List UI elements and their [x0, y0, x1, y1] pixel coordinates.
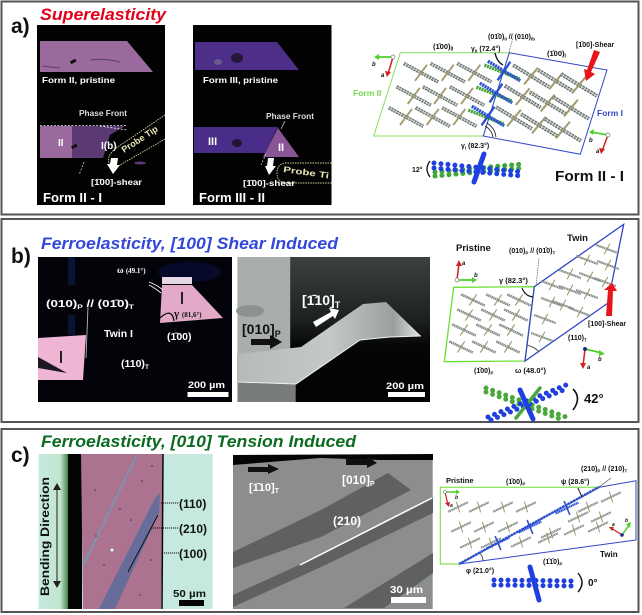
photo: bending optical: [38, 454, 213, 609]
diagram: pristine and twin tension lattice: P: [522, 482, 525, 486]
photo: twin optical: // (01̄0): [83, 298, 129, 310]
photo: form III to II: [1̄00]-shear: [243, 178, 296, 188]
diagram: pristine and twin lattice: T: [552, 250, 555, 256]
photo: bending optical: (210): [179, 522, 207, 536]
photo: twin optical: T: [145, 364, 149, 371]
diagram: pristine and twin lattice: Twin: [567, 233, 588, 244]
icon: axes twin c: [609, 518, 631, 537]
icon: axes twin: [580, 347, 605, 371]
label: 42 degrees: 42°: [584, 391, 604, 406]
photo: form III to II: Probe Ti: [283, 164, 330, 180]
photo: bending optical: Bending Direction: [38, 477, 52, 596]
photo: twin optical: γ (81,6°): [173, 308, 202, 320]
diagram: pristine and twin tension lattice: P: [597, 468, 600, 474]
diagram: pristine and twin lattice: // (01̄0): [528, 247, 552, 255]
heading: superelasticity: Superelasticity: [40, 6, 167, 24]
diagram: form II and I lattice: [353, 33, 624, 185]
label: 0 degrees: 0°: [588, 578, 598, 589]
photo: bending SEM: [233, 454, 433, 609]
photo: bending SEM: [010]: [342, 473, 370, 487]
photo: bending optical: 50 µm: [173, 589, 206, 600]
diagram: form II and I lattice: // (010): [507, 34, 531, 41]
diagram: pristine and twin tension lattice: T: [624, 468, 627, 474]
diagram: form II and I lattice: (1̄00): [433, 42, 451, 51]
photo: form III to II: III: [208, 136, 217, 148]
panel: c ferroelasticity tension: [2, 429, 638, 612]
diagram: form II and I lattice: I: [565, 54, 567, 60]
photo: twin SEM: P: [275, 329, 281, 339]
diagram: pristine and twin tension lattice: φ (21.0°): [466, 567, 494, 575]
photo: bending optical: (110): [179, 497, 206, 511]
diagram: pristine and twin tension lattice: P: [559, 562, 562, 566]
diagram: pristine and twin tension lattice: [440, 466, 636, 600]
icon: axes pristine: b: [474, 273, 478, 279]
panel label a: a): [11, 15, 30, 38]
photo: twin SEM: [236, 257, 430, 402]
photo: form II to I: Probe Tip: [120, 124, 160, 155]
icon: axes twin c: a: [612, 522, 615, 528]
diagram: pristine and twin tension lattice: ψ (28.6°): [561, 478, 589, 486]
diagram: pristine and twin lattice: γ (82.3°): [499, 276, 528, 285]
icon: axes form I: [589, 129, 610, 155]
diagram: form II and I lattice: Form I: [597, 108, 623, 118]
diagram: pristine and twin lattice: P: [490, 370, 493, 376]
icon: axes twin: a: [587, 365, 591, 371]
diagram: form II and I lattice: Ib: [531, 36, 535, 42]
panel: b ferroelasticity shear: [2, 219, 638, 422]
photo: form III to II: Phase Front: [266, 112, 314, 121]
icon: axes pristine c: a: [450, 503, 453, 509]
diagram: pristine and twin lattice: (010): [509, 248, 525, 255]
photo: twin SEM: [010]: [242, 321, 275, 337]
photo: twin optical: ω (49.1°): [117, 265, 146, 275]
photo: bending SEM: P: [370, 481, 375, 488]
diagram: pristine and twin tension lattice: // (210): [600, 466, 624, 473]
icon: axes twin: b: [598, 357, 602, 363]
photo: form II to I: Phase Front: [79, 109, 127, 118]
diagram: pristine and twin lattice: T: [584, 338, 587, 342]
photo: twin optical: (010): [46, 298, 71, 310]
photo: form III to II: [193, 25, 332, 205]
panel label c: c): [11, 444, 30, 467]
diagram: pristine and twin tension lattice: (210): [581, 466, 597, 473]
photo: twin optical: (110): [121, 358, 145, 370]
photo: bending optical: (100): [179, 547, 207, 561]
photo: twin optical: (1̄00): [167, 331, 192, 343]
molecule: form II-I overlay: 12°: [412, 166, 423, 174]
photo: twin SEM: 200 µm: [386, 381, 424, 392]
photo: twin optical: 200 µm: [188, 380, 225, 390]
diagram: pristine and twin lattice: (1̄00): [474, 368, 490, 375]
photo: twin optical: P: [77, 304, 84, 311]
molecule: tension overlay: [494, 567, 576, 600]
diagram: pristine and twin lattice: ω (48.0°): [515, 366, 547, 375]
diagram: pristine and twin tension lattice: (1̄00): [506, 479, 522, 486]
diagram: form II and I lattice: II: [475, 48, 477, 54]
icon: axes form II: b: [372, 62, 376, 68]
photo: twin optical: [38, 257, 232, 402]
photo: twin SEM: T: [335, 300, 341, 310]
diagram: form II and I lattice: Form II: [353, 88, 381, 98]
photo: twin optical: T: [129, 304, 134, 311]
icon: axes pristine: [455, 260, 478, 283]
diagram: pristine and twin tension lattice: Twin: [600, 550, 618, 559]
photo: form II to I: [37, 25, 165, 205]
heading: ferroelasticity tension: Ferroelasticity, [010] Tension Induced: [41, 432, 357, 451]
icon: axes pristine c: b: [455, 495, 458, 501]
diagram: form II and I lattice: (72.4°): [477, 45, 500, 53]
icon: axes pristine c: [444, 490, 460, 509]
photo: form II to I: Form II - I: [43, 190, 102, 205]
photo: bending SEM: (210): [333, 514, 361, 528]
diagram: pristine and twin tension lattice: Pristine: [446, 476, 474, 485]
photo: form III to II: Form III - II: [199, 190, 265, 205]
diagram: form II and I lattice: γ: [461, 143, 465, 150]
photo: form III to II: Form III, pristine: [203, 75, 278, 85]
panel label b: b): [11, 245, 31, 268]
photo: bending SEM: [1̄10]: [249, 482, 275, 494]
icon: axes form I: a: [596, 149, 600, 155]
diagram: form II and I lattice: (82.3°): [466, 142, 489, 150]
diagram: form II and I lattice: [1̄00]-Shear: [576, 41, 614, 49]
photo: form II to I: I(b): [101, 141, 117, 152]
diagram: form II and I lattice: II: [451, 46, 454, 52]
diagram: pristine and twin lattice: Pristine: [456, 243, 491, 254]
icon: axes pristine: a: [462, 261, 466, 267]
photo: form II to I: Form II, pristine: [42, 75, 115, 85]
diagram: form II and I lattice: γ: [471, 46, 475, 53]
diagram: pristine and twin tension lattice: (1̄1̄0): [543, 559, 559, 566]
icon: axes form II: [372, 54, 395, 79]
icon: axes twin c: b: [625, 518, 628, 524]
molecule: form II-I overlay: [412, 154, 523, 182]
diagram: form II and I lattice: II: [504, 36, 507, 42]
photo: form II to I: [1̄00]-shear: [91, 177, 143, 187]
photo: twin SEM: [1̄10]: [302, 292, 335, 308]
diagram: pristine and twin lattice: [444, 224, 626, 420]
diagram: form II and I lattice: (01̄0): [488, 34, 504, 41]
photo: bending SEM: 30 µm: [390, 585, 423, 596]
diagram: pristine and twin lattice: P: [525, 250, 528, 256]
diagram: form II and I lattice: I: [465, 146, 466, 150]
heading: ferroelasticity shear: Ferroelasticity, [100] Shear Induced: [41, 234, 339, 253]
panel: a superelasticity: [2, 2, 638, 214]
photo: form III to II: II: [278, 142, 284, 154]
icon: axes form II: a: [381, 73, 385, 79]
diagram: form II and I lattice: (1̄00): [547, 49, 565, 58]
icon: axes form I: b: [589, 138, 593, 144]
photo: form II to I: II: [58, 138, 64, 149]
photo: bending SEM: T: [275, 488, 280, 495]
diagram: pristine and twin lattice: [100]-Shear: [588, 321, 626, 328]
photo: twin optical: Twin I: [104, 328, 133, 340]
label: Form II - I: Form II - I: [555, 168, 624, 185]
molecule: pristine-twin overlay: [486, 385, 566, 420]
diagram: pristine and twin lattice: (110): [568, 335, 584, 342]
